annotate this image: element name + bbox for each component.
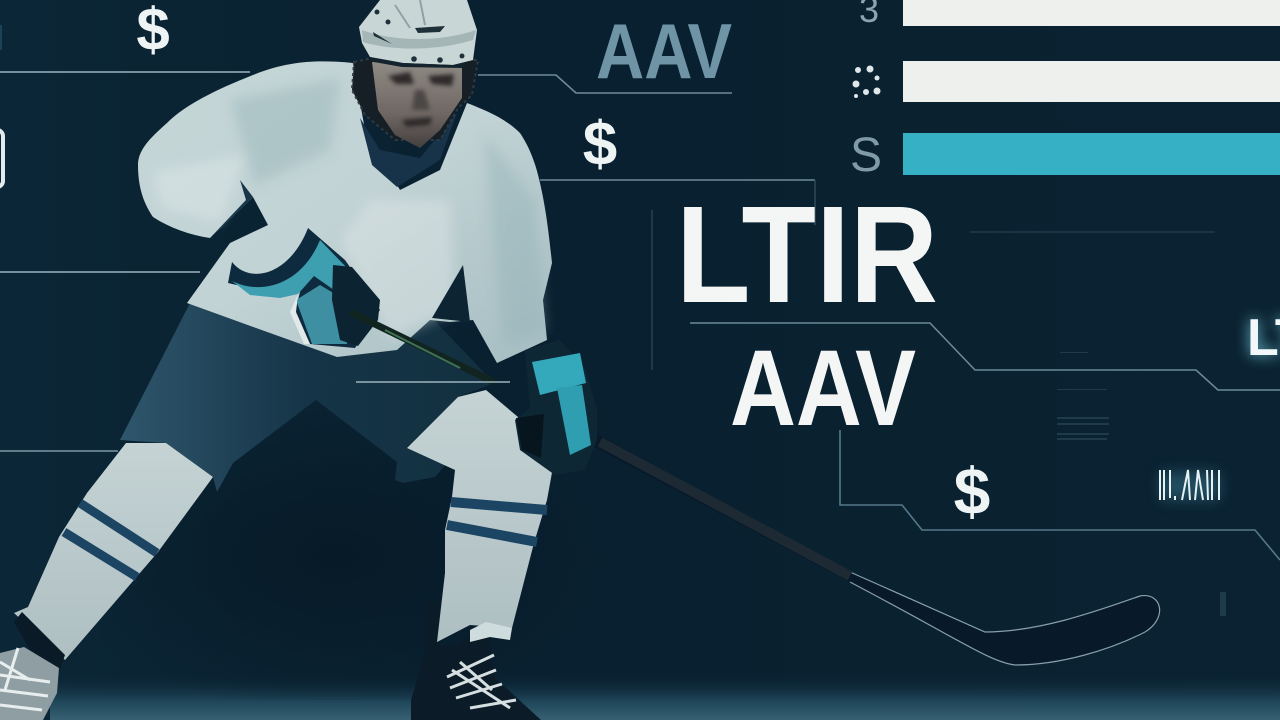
- horizontal line over stick: [356, 381, 510, 383]
- bar 1: white: [903, 0, 1280, 26]
- lower glove: [515, 340, 597, 475]
- hockey player: [0, 0, 597, 720]
- jersey logo and upper glove: [228, 228, 380, 348]
- jersey highlights and folds: [152, 78, 545, 345]
- heading: LTIR: LTIR: [676, 178, 938, 332]
- jersey: [138, 61, 552, 363]
- dollar sign: centre: $: [583, 110, 617, 179]
- upper stick shaft: [350, 312, 494, 382]
- helmet: [359, 0, 477, 65]
- gap between sleeve and body: [210, 180, 253, 238]
- bar label 2: icon: [852, 66, 880, 98]
- rear leg: sock and skate: [0, 443, 213, 720]
- glowing barcode glyph: [1160, 470, 1220, 500]
- front leg: sock and skate: [407, 390, 553, 720]
- hair: [352, 58, 478, 140]
- stick highlight: [385, 330, 460, 368]
- left edge marks: [0, 25, 3, 187]
- label: AAV top: AAV: [596, 7, 732, 95]
- dark shade behind player: [100, 380, 660, 700]
- bar 3: teal: [903, 133, 1280, 175]
- dollar sign: lower right: $: [954, 454, 990, 528]
- face shadows: [388, 72, 454, 127]
- bar label 3: S: [850, 129, 882, 182]
- head: [352, 0, 478, 148]
- bar 2: white: [903, 61, 1280, 102]
- face: [372, 62, 462, 148]
- circuit lines: [0, 72, 1280, 560]
- helmet band and vents: [362, 0, 476, 68]
- collar: [360, 113, 457, 187]
- ice floor glow: [50, 672, 1280, 720]
- hockey stick blade and lower shaft: [592, 434, 1160, 665]
- pants: [120, 303, 494, 492]
- dark wedge under right sleeve: [432, 265, 470, 322]
- subheading: AAV: AAV: [730, 327, 916, 448]
- faint data marks: [1057, 352, 1226, 616]
